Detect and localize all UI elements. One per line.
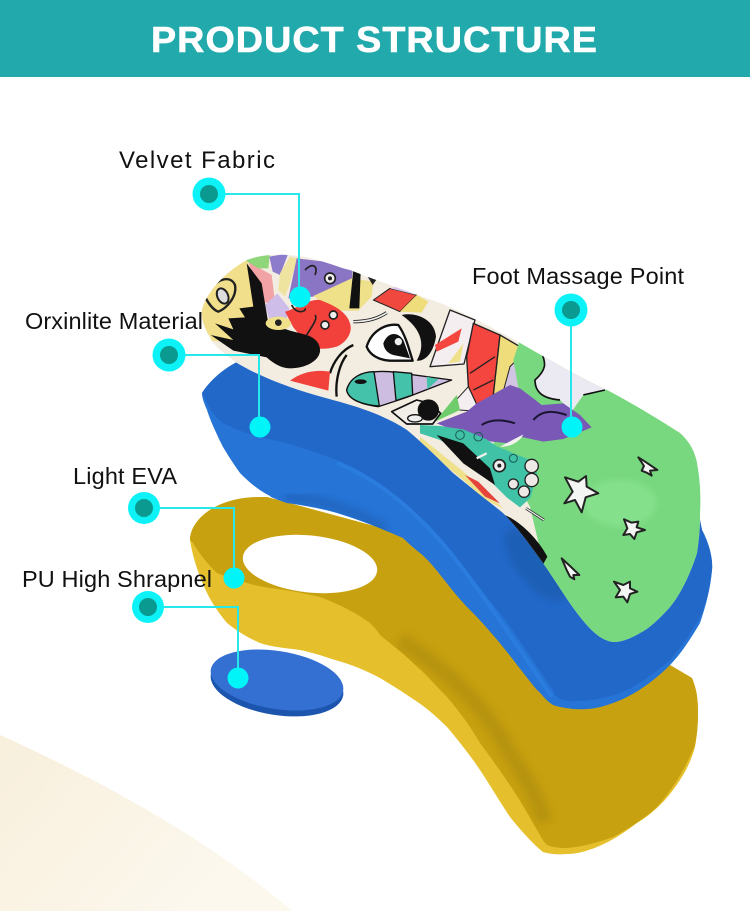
stars	[562, 457, 657, 602]
purple doodle	[288, 258, 353, 298]
red feather	[467, 323, 500, 412]
blue edge highlight	[337, 463, 552, 697]
callout: Foot Massage Point: Foot Massage Point	[472, 263, 684, 289]
background curve	[0, 735, 292, 911]
insole shadow on blue	[494, 519, 576, 611]
yellow top surface	[190, 497, 698, 848]
pale yellow patch	[202, 260, 254, 342]
callout: Orxinlite Material	[25, 308, 270, 438]
horn tip	[526, 508, 544, 520]
red gem	[373, 288, 417, 312]
heel eye doodle	[205, 279, 235, 312]
pink and green patches	[248, 262, 275, 303]
callout: Light EVA	[73, 463, 244, 588]
white feather	[430, 310, 475, 367]
yellow face	[313, 278, 373, 311]
left half doodles	[193, 252, 527, 424]
green field	[493, 342, 700, 642]
callout: Velvet Fabric	[119, 147, 310, 308]
yellow insole layer	[190, 497, 698, 854]
blue base layer	[202, 362, 712, 709]
green highlight	[583, 480, 657, 527]
callout: Light EVA: Light EVA	[73, 463, 177, 489]
heavy brow	[402, 314, 436, 361]
black spike monster	[211, 263, 320, 368]
cloud lumps	[508, 459, 538, 497]
title: PRODUCT STRUCTURE	[151, 19, 598, 60]
right half doodles	[420, 342, 700, 642]
blue side shadow	[285, 497, 385, 530]
small eye	[392, 400, 441, 424]
black lower blob	[502, 514, 547, 564]
arch hole	[240, 529, 380, 599]
header banner	[0, 0, 750, 77]
callout: Velvet Fabric: Velvet Fabric	[119, 147, 275, 174]
big eye	[367, 325, 413, 361]
red wedge	[290, 371, 330, 391]
callout: Foot Massage Point	[472, 263, 684, 438]
callout: Orxinlite Material: Orxinlite Material	[25, 308, 203, 334]
unicorn horn	[347, 371, 452, 407]
horn stroke	[353, 313, 387, 322]
pale cloud	[536, 356, 606, 410]
yellow wall shadow	[400, 640, 545, 822]
callout: PU High Shrapnel: PU High Shrapnel	[22, 566, 212, 592]
callout: PU High Shrapnel	[22, 566, 248, 688]
teal cloud monster	[420, 425, 537, 507]
lower white shards	[457, 386, 477, 412]
blue top surface	[202, 362, 712, 701]
blue round pad	[206, 641, 348, 725]
purple dinosaur	[437, 385, 592, 443]
red monster	[285, 300, 351, 349]
patterned velvet top layer	[202, 254, 700, 642]
